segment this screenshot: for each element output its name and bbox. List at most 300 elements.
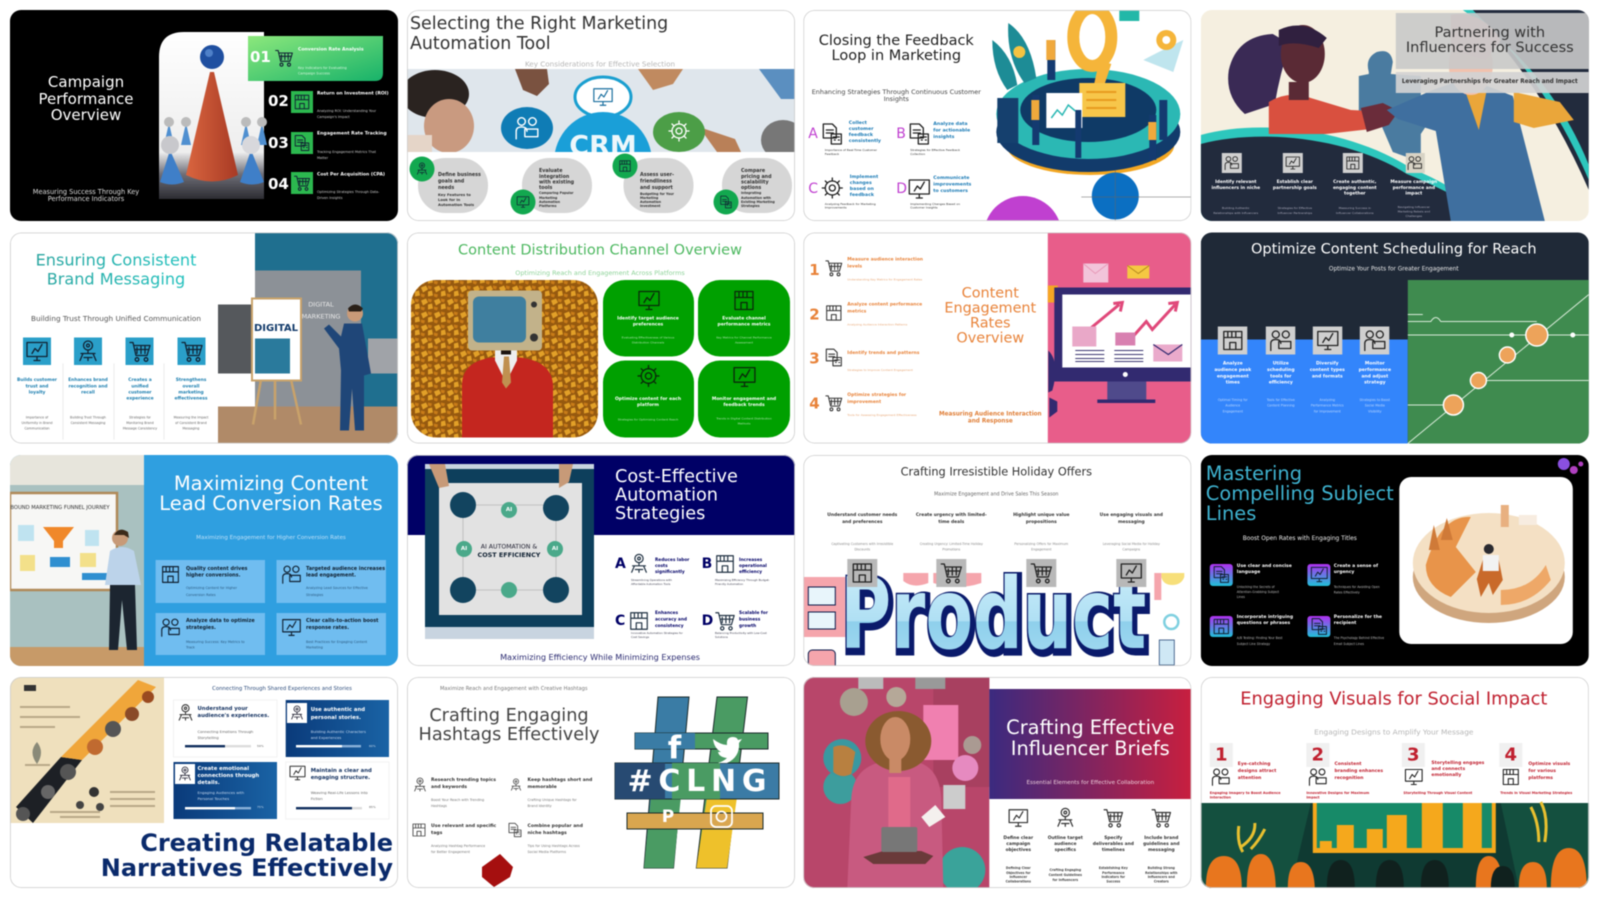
item C <box>808 174 879 210</box>
item B: operational <box>739 562 767 568</box>
tile: optimize content: Optimize content for each <box>615 396 681 402</box>
title: Automation <box>615 486 718 506</box>
item C: Innovative Automation Strategies for <box>631 631 684 635</box>
step: assess friendliness: and support <box>640 184 674 190</box>
hashtag graphic <box>615 697 779 868</box>
title: Selecting the Right Marketing <box>410 14 668 34</box>
column: peak times: Optimal Timing for <box>1218 398 1248 402</box>
decorative dots <box>1558 458 1583 474</box>
box: analyze data: Analyze data to optimize <box>186 618 255 624</box>
column: builds trust: Importance of <box>26 416 49 420</box>
column: monitor: Monitor <box>1365 360 1385 366</box>
column: deliverables: Specify <box>1104 834 1123 840</box>
column: peak times: engagement <box>1217 373 1250 379</box>
item D: improvements <box>933 181 972 187</box>
item A: Feedback <box>825 152 839 156</box>
box: quality content: Conversion Rates <box>186 593 216 597</box>
hashtag graphic: #CLNG <box>628 764 766 799</box>
item 01 highlighted <box>248 36 383 81</box>
column: marketing effectiveness <box>174 338 209 430</box>
tile: clear structure: 85% <box>369 805 376 809</box>
step 1 <box>1210 743 1281 800</box>
slide: Partnering with Influencers for Success <box>1201 10 1589 225</box>
subtitle: Insights <box>884 95 910 103</box>
tile: monitor engagement: Monitor engagement and <box>712 396 776 402</box>
box: quality content: higher conversions. <box>186 572 241 578</box>
step: evaluate integration: Evaluate <box>539 168 563 174</box>
column: urgency: time deals <box>938 518 965 524</box>
column: marketing effectiveness: Measuring the Impact <box>174 416 209 420</box>
column: objectives: Defining Clear <box>1006 866 1031 870</box>
item: personalize <box>1307 614 1384 646</box>
step: evaluate integration: Marketing <box>539 196 558 200</box>
item: relevant tags: Analyzing Hashtag Performance <box>431 844 485 848</box>
item 2: metrics <box>847 308 867 314</box>
item: research <box>415 776 496 808</box>
slide: Ensuring Consistent Brand Messaging <box>10 232 398 444</box>
tile: understand audience: Understand your <box>198 706 248 712</box>
column: builds trust: loyalty <box>29 389 46 395</box>
item: relevant tags <box>413 822 497 854</box>
gradient title panel: Crafting Effective <box>1006 716 1174 738</box>
column: urgency <box>916 512 987 587</box>
item B: for actionable <box>933 127 970 133</box>
column: builds trust <box>17 338 58 430</box>
item 04: Driven Insights <box>317 196 343 200</box>
item B: Maximizing Efficiency Through Budget- <box>715 578 770 582</box>
title: Closing the Feedback <box>819 33 974 49</box>
step: authentic content <box>1333 153 1377 215</box>
step: define goals: Look for in <box>438 198 461 202</box>
column: scheduling tools: Tools for Effective <box>1266 398 1295 402</box>
column: peak times: Analyze <box>1223 360 1243 366</box>
hashtag graphic: P <box>662 807 674 827</box>
box: clear CTA: Clear calls-to-action boost <box>306 618 379 624</box>
step: identify influencers: Relationships with Influencers <box>1213 211 1259 215</box>
item B <box>702 556 770 586</box>
column: urgency: Promotions <box>942 548 961 552</box>
column: builds trust: Builds customer <box>17 376 58 382</box>
item A: consistently <box>849 138 881 144</box>
step: measure performance: performance and <box>1393 184 1435 190</box>
tile: optimize content: platform <box>637 402 659 408</box>
item: clear language <box>1210 562 1292 599</box>
title: Overview <box>956 330 1024 346</box>
item 01 highlighted: Conversion Rate Analysis <box>298 46 364 52</box>
column: marketing effectiveness: effectiveness <box>175 395 208 401</box>
item: relevant tags: tags <box>431 830 443 836</box>
column: enhances brand: Building Trust Through <box>70 416 106 420</box>
step 1: Engaging Imagery to Boost Audience <box>1210 791 1281 795</box>
column: peak times <box>1214 326 1252 414</box>
step: define goals: Define business <box>438 172 481 178</box>
tile: monitor engagement <box>698 360 790 438</box>
column: visuals: Use engaging visuals and <box>1100 512 1163 518</box>
column: marketing effectiveness: Messaging <box>183 426 199 430</box>
item: popular and niche: Combine popular and <box>528 822 583 828</box>
column: visuals: messaging <box>1118 518 1145 524</box>
step: compare pricing: Existing Marketing <box>741 200 775 204</box>
title: Hashtags Effectively <box>419 725 599 745</box>
step: partnership goals <box>1273 153 1317 215</box>
column: value propositions: Highlight unique value <box>1013 512 1069 518</box>
item: intriguing questions: questions or phrases <box>1237 620 1290 626</box>
title: Maximizing Content <box>174 472 368 494</box>
subtitle: Boost Open Rates with Engaging Titles <box>1243 536 1357 542</box>
title: Strategies <box>615 504 705 524</box>
column: scheduling tools: efficiency <box>1269 379 1293 385</box>
item 02: Return on Investment (ROI) <box>317 90 389 96</box>
title: Narratives Effectively <box>101 854 393 882</box>
item 1: levels <box>847 263 862 269</box>
tile: emotional connections <box>174 762 277 819</box>
slide: Creating Relatable Narratives Effectively <box>10 677 398 888</box>
step: identify influencers: Building Authentic <box>1222 206 1250 210</box>
column: audience specifics: for Influencers <box>1053 878 1078 882</box>
tile: emotional connections: Create emotional <box>198 766 249 772</box>
item: popular and niche: niche hashtags <box>528 830 567 836</box>
item 3: Identify trends and patterns <box>847 350 920 356</box>
item D: D <box>896 181 907 197</box>
title: Content <box>962 286 1019 302</box>
item: short hashtags: memorable <box>528 784 557 790</box>
item: intriguing questions <box>1210 614 1293 646</box>
title: Brand Messaging <box>47 269 185 288</box>
step: evaluate integration <box>510 158 592 214</box>
box: clear CTA: response rates. <box>306 625 349 631</box>
column: brand guidelines: Include brand <box>1144 834 1178 840</box>
step 4: Optimize visuals <box>1528 760 1571 766</box>
item 4: improvement <box>847 398 882 404</box>
box: targeted audience: Analyzing Lead Sources for Effective <box>306 586 368 590</box>
gradient title panel <box>989 689 1191 799</box>
column: brand guidelines: guidelines and <box>1143 840 1179 846</box>
item 2: Analyzing Audience Interaction Patterns <box>847 322 908 326</box>
slide: Campaign Performance Overview <box>10 10 398 221</box>
column: brand guidelines: Relationships with <box>1145 871 1177 875</box>
step 4: Trends in Visual Marketing Strategies <box>1500 791 1572 795</box>
tile: understand audience <box>174 700 277 757</box>
step: measure performance: Challenges <box>1406 214 1423 218</box>
step: measure performance: Marketing Rebels and <box>1398 210 1430 214</box>
subtitle: Maximize Reach and Engagement with Creative Hashtags <box>440 686 588 692</box>
item C: Implement <box>850 174 879 180</box>
slide: Maximizing Content Lead Conversion Rates <box>10 455 398 666</box>
subtitle: Performance Indicators <box>48 195 125 203</box>
slide: Optimize Content Scheduling for Reach <box>1201 232 1589 444</box>
item C <box>615 610 687 639</box>
title: Crafting Irresistible Holiday Offers <box>901 466 1092 478</box>
step 2: Impact <box>1306 796 1320 800</box>
tile: channel metrics <box>698 280 790 356</box>
item: intriguing questions: A/B Testing: Finding Your Best <box>1237 636 1283 640</box>
item B: B <box>896 126 906 142</box>
item B: Increases <box>739 556 763 562</box>
poster: timeline diagonal <box>10 677 164 823</box>
tile: identify target audience: preferences <box>633 321 664 327</box>
item D: Scalable for <box>739 610 769 616</box>
step: authentic content: Create authentic, <box>1333 178 1377 184</box>
item 4 <box>809 392 917 417</box>
item: urgency: Rates Effectively <box>1334 590 1360 594</box>
step: define goals: goals and <box>438 178 465 184</box>
tile: clear structure: Maintain a clear and <box>311 768 372 774</box>
photo: AI automation board: AI <box>461 546 467 552</box>
box: analyze data: strategies. <box>186 625 216 631</box>
item: popular and niche <box>509 822 583 854</box>
step 3: 3 <box>1407 744 1420 766</box>
item C: Enhances <box>655 610 678 616</box>
tile: identify target audience: Identify target audience <box>617 315 679 321</box>
step 1: attention <box>1238 774 1261 780</box>
box: targeted audience <box>276 560 386 603</box>
item A: feedback <box>849 132 874 138</box>
column: brand guidelines: Influencers and <box>1148 875 1175 879</box>
subtitle: Measuring Audience Interaction <box>939 412 1042 418</box>
step: measure performance: impact <box>1405 190 1422 196</box>
item: clear language: Attention-Grabbing Subject <box>1237 590 1280 594</box>
box: quality content: Optimizing Content for Higher <box>186 586 238 590</box>
subtitle: Enhancing Strategies Through Continuous Customer <box>812 88 981 96</box>
column: audience specifics: Content Guidelines <box>1049 873 1082 877</box>
step 1: designs attract <box>1238 768 1277 774</box>
title: Mastering <box>1206 462 1302 484</box>
step 2: branding enhances <box>1335 768 1383 774</box>
item C: Analyzing Feedback for Marketing <box>825 202 876 206</box>
step 2: Innovative Designs for Maximum <box>1306 791 1370 795</box>
item: short hashtags <box>511 776 592 808</box>
tile: emotional connections: 75% <box>257 805 264 809</box>
item: relevant tags: for Better Engagement <box>431 850 471 854</box>
column: customer needs: Captivating Customers with Irresistible <box>831 542 893 546</box>
title panel <box>1396 13 1589 93</box>
step: compare pricing: Automation with <box>741 196 772 200</box>
step: assess friendliness: Assess user- <box>640 172 674 178</box>
step: compare pricing: Compare <box>741 168 766 174</box>
item B: B <box>702 556 712 572</box>
column: objectives: Influencer <box>1009 875 1028 879</box>
slide: Engaging Visuals for Social Impact <box>1201 677 1589 888</box>
column: urgency: Creating Urgency: Limited-Time Holiday <box>920 542 983 546</box>
tile: emotional connections: details. <box>198 780 220 786</box>
item A: Affordable Automation Tools <box>631 582 671 586</box>
subtitle: Engaging Designs to Amplify Your Message <box>1314 728 1474 736</box>
photo: CRM meeting <box>407 68 795 153</box>
column: peak times: Engagement <box>1223 410 1244 414</box>
slide: Crafting Irresistible Holiday Offers <box>803 455 1191 675</box>
item: clear language: Use clear and concise <box>1237 562 1292 568</box>
step: assess friendliness: Budgeting for Your <box>640 192 674 196</box>
column: deliverables: deliverables and <box>1093 840 1134 846</box>
step: define goals: Key Features to <box>438 193 471 197</box>
column: scheduling tools <box>1266 326 1295 408</box>
title: Rates <box>970 316 1011 332</box>
item A: Streamlining Operations with <box>631 578 672 582</box>
step: assess friendliness: friendliness <box>640 178 672 184</box>
column: builds trust: Uniformity in Brand <box>21 421 53 425</box>
item: popular and niche: Tips for Using Hashtags Across <box>526 844 580 848</box>
title: Performance <box>38 90 134 108</box>
photo: AI automation board: COST EFFICIENCY <box>478 551 541 559</box>
item: popular and niche: Social Media Platforms <box>528 850 566 854</box>
item: short hashtags: Brand Identity <box>528 804 552 808</box>
photo: funnel whiteboard: BOUND MARKETING FUNNEL JOURNEY <box>10 505 110 511</box>
column: unified experience <box>123 338 157 430</box>
tile: channel metrics: Key Metrics for Channel Performance <box>716 336 772 340</box>
title panel: Influencers for Success <box>1406 40 1574 56</box>
step 4: platforms <box>1528 774 1553 780</box>
column: brand guidelines: Creators <box>1154 880 1169 884</box>
column: deliverables: timelines <box>1102 846 1125 852</box>
column: monitor: Visibility <box>1368 410 1382 414</box>
column: objectives: Define clear <box>1003 834 1034 840</box>
item: intriguing questions: Incorporate intriguing <box>1237 614 1293 620</box>
item 02: Campaign's Impact <box>317 115 350 119</box>
item D: Customer Insights <box>910 206 938 210</box>
red heptagon <box>482 854 513 887</box>
item B: Strategies for Effective Feedback <box>910 148 960 152</box>
item 04: Cost Per Acquisition (CPA) <box>317 172 385 178</box>
title: Loop in Marketing <box>832 48 961 64</box>
photo: digital marketing presenter: DIGITAL <box>308 300 334 308</box>
tile: understand audience: Storytelling <box>198 736 219 740</box>
step: compare pricing: Strategies <box>741 204 760 208</box>
subtitle: Connecting Through Shared Experiences and Stories <box>212 686 352 692</box>
item C: C <box>808 181 818 197</box>
step 4: 4 <box>1505 744 1517 766</box>
photo: AI automation board <box>425 464 594 639</box>
item 02: Analyzing ROI: Understanding Your <box>317 109 377 113</box>
illustration: Product wordmark: Product <box>840 558 1146 672</box>
item A <box>808 120 881 156</box>
illustration: isometric workspace <box>1399 477 1573 644</box>
title panel: Leveraging Partnerships for Greater Reach and Impact <box>1402 79 1578 85</box>
item 03 <box>268 130 387 160</box>
column: customer needs: Discounts <box>854 548 870 552</box>
tile: authentic stories <box>286 700 389 757</box>
item 3: Strategies to Improve Content Engagement <box>847 368 914 372</box>
column: marketing effectiveness: overall <box>182 383 200 389</box>
step: define goals: needs <box>438 184 454 190</box>
column: diversify: content types <box>1310 366 1345 372</box>
item B <box>896 120 970 156</box>
title: Engaging Visuals for Social Impact <box>1240 688 1547 710</box>
column: enhances brand: Enhances brand <box>68 376 108 382</box>
item A: customer <box>849 126 874 132</box>
subtitle: Maximizing Engagement for Higher Conversion Rates <box>196 535 346 541</box>
title: Compelling Subject <box>1206 482 1394 504</box>
step: assess friendliness: Investment <box>640 204 661 208</box>
tile: identify target audience: Evaluating Effectiveness of Various <box>622 336 675 340</box>
item: clear language: language <box>1237 568 1260 574</box>
item D: Implementing Changes Based on <box>910 202 960 206</box>
tile: monitor engagement: Trends in Digital Content Distribution <box>715 416 772 420</box>
slide: Closing the Feedback Loop in Marketing <box>803 10 1192 222</box>
column: objectives: Collaborations <box>1006 880 1031 884</box>
item 4: 4 <box>809 394 820 412</box>
column: objectives <box>1003 810 1034 884</box>
item C: Improvements <box>825 206 847 210</box>
tile: clear structure: Weaving Real-Life Lessons into <box>311 791 368 795</box>
column: audience specifics: Crafting Engaging <box>1050 868 1081 872</box>
step: authentic content: Measuring Success in <box>1339 206 1371 210</box>
column: audience specifics: audience <box>1054 840 1077 846</box>
step: identify influencers <box>1212 153 1260 215</box>
item 04: 04 <box>268 175 289 193</box>
box: targeted audience: Strategies <box>306 593 324 597</box>
step: partnership goals: Establish clear <box>1277 178 1314 184</box>
item 04: Optimizing Strategies Through Data- <box>317 190 380 194</box>
item 1: 1 <box>809 261 820 279</box>
step: authentic content: Influencer Collaborations <box>1336 211 1374 215</box>
column: deliverables: Indicators for <box>1101 875 1126 879</box>
column: enhances brand: Consistent Messaging <box>71 421 105 425</box>
item A: costs <box>655 562 668 568</box>
step: evaluate integration: tools <box>539 184 553 190</box>
column: diversify <box>1310 326 1345 414</box>
gradient title panel: Influencer Briefs <box>1011 736 1170 760</box>
step: authentic content: together <box>1344 190 1366 196</box>
column: monitor: Strategies to Boost <box>1360 398 1391 402</box>
box: clear CTA: Best Practices for Engaging Content <box>306 640 368 644</box>
photo: cone and pawns <box>159 32 267 199</box>
illustration: monitor and envelopes <box>1048 232 1191 444</box>
title: Automation Tool <box>410 34 551 54</box>
item 04 <box>268 172 385 200</box>
column: objectives: Objectives for <box>1006 871 1031 875</box>
slide: Crafting Engaging Hashtags Effectively <box>407 677 795 888</box>
item 1: Understanding Key Metrics for Engagement Rates <box>847 278 923 282</box>
tile: monitor engagement: Methods <box>738 422 751 426</box>
photo: funnel whiteboard <box>10 455 144 666</box>
column: value propositions: Personalizing Offers for Maximum <box>1014 542 1068 546</box>
column: urgency: Create urgency with limited- <box>916 512 987 518</box>
column: scheduling tools: Content Planning <box>1267 404 1295 408</box>
subtitle: Maximize Engagement and Drive Sales This Season <box>934 492 1058 498</box>
step: measure performance: Measure campaign <box>1390 178 1437 184</box>
item: short hashtags: Crafting Unique Hashtags for <box>528 798 577 802</box>
item C: based on <box>850 186 874 192</box>
column: scheduling tools: Utilize <box>1273 360 1289 366</box>
step 1: Eye-catching <box>1238 760 1270 766</box>
step: compare pricing: scalability <box>741 179 769 185</box>
step: assess friendliness: Marketing <box>640 196 659 200</box>
column: marketing effectiveness: Strengthens <box>176 376 207 382</box>
column: deliverables <box>1093 810 1134 884</box>
column: audience specifics: Outline target <box>1048 834 1083 840</box>
tile: clear structure: engaging structure. <box>311 775 370 781</box>
item 03: 03 <box>268 134 289 152</box>
step: compare pricing: options <box>741 184 761 190</box>
item: short hashtags: Keep hashtags short and <box>528 776 592 782</box>
item 02: 02 <box>268 92 289 110</box>
column: scheduling tools: scheduling <box>1267 366 1295 372</box>
subtitle: Key Considerations for Effective Selection <box>525 60 675 68</box>
photo: woman among spheres <box>803 677 989 893</box>
column: value propositions: Engagement <box>1031 548 1052 552</box>
item 03: Tracking Engagement Metrics That <box>316 150 377 154</box>
item: research: Hashtags <box>431 804 447 808</box>
column: value propositions <box>1013 512 1069 587</box>
tile: identify target audience: Distribution Channels <box>632 340 665 344</box>
tile: clear structure <box>286 762 389 819</box>
item: research: Boost Your Reach with Trending <box>431 798 484 802</box>
column: visuals: Campaigns <box>1122 548 1141 552</box>
column: deliverables: Success <box>1106 880 1120 884</box>
step 4: for various <box>1528 768 1556 774</box>
item: personalize: Personalize for the <box>1334 614 1382 620</box>
step: assess friendliness: Automation <box>640 200 662 204</box>
